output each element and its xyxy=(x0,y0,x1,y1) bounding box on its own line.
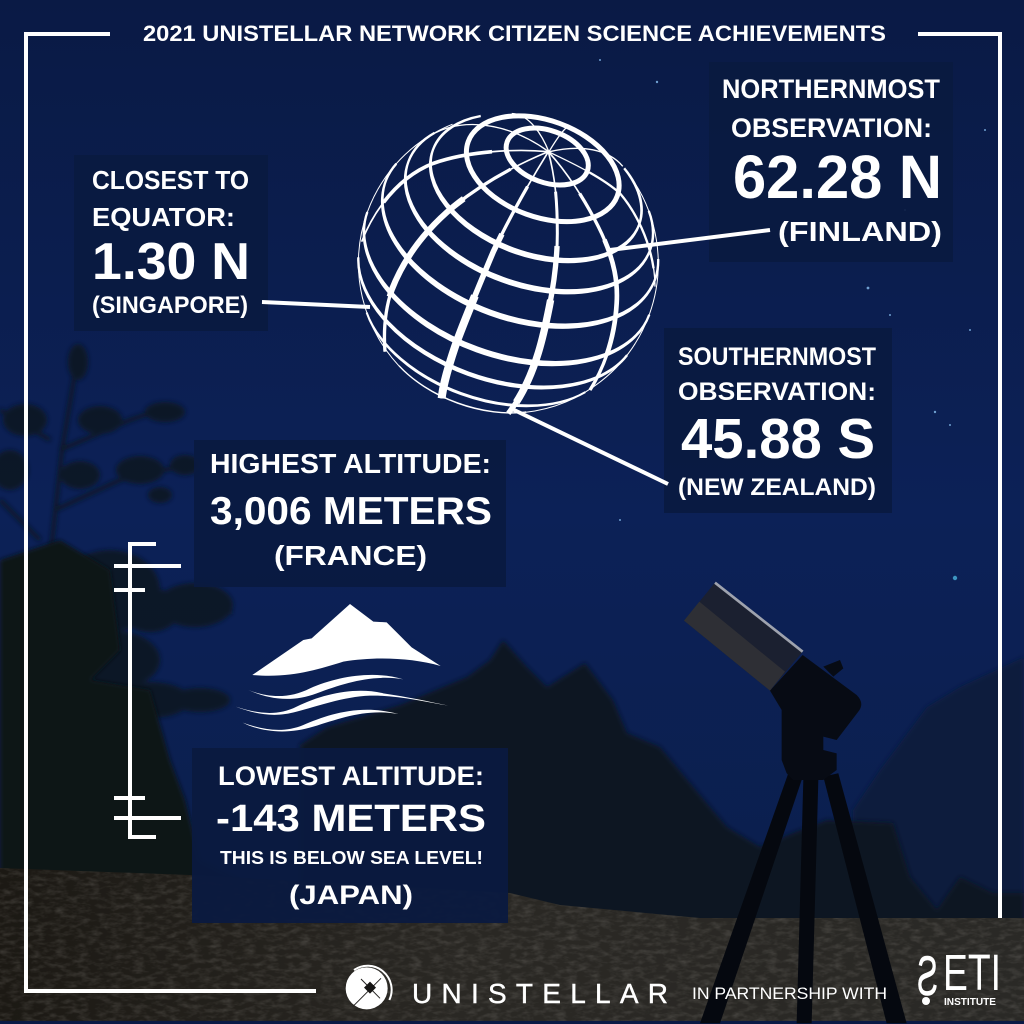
panel: closest to equator: EQUATOR: xyxy=(92,202,235,232)
panel: southernmost observation xyxy=(664,328,892,513)
title: 2021 UNISTELLAR NETWORK CITIZEN SCIENCE ACHIEVEMENTS xyxy=(143,21,886,46)
meridian: far left xyxy=(362,150,548,242)
meridian: far left front xyxy=(384,152,548,352)
partnership text: IN PARTNERSHIP WITH xyxy=(692,985,887,1003)
panel: closest to equator: (SINGAPORE) xyxy=(92,292,248,319)
panel: lowest altitude xyxy=(192,748,508,923)
panel: lowest altitude: (JAPAN) xyxy=(289,880,413,910)
panel: northernmost observation: NORTHERNMOST xyxy=(722,74,940,104)
logo: SETI Institute: S xyxy=(917,944,938,1007)
globe icon xyxy=(317,71,700,454)
panel: highest altitude xyxy=(194,440,506,587)
panel: closest to equator xyxy=(74,155,268,331)
logo: SETI Institute: ETI xyxy=(943,944,1001,1001)
front meridians xyxy=(362,150,655,413)
panel: southernmost observation: 45.88 S xyxy=(681,407,875,471)
panel: highest altitude: 3,006 METERS xyxy=(210,490,492,533)
lower tree mass xyxy=(0,540,240,890)
panel: lowest altitude: -143 METERS xyxy=(216,798,486,840)
panel: lowest altitude: LOWEST ALTITUDE: xyxy=(218,761,484,791)
panel: northernmost observation: OBSERVATION: xyxy=(731,113,932,143)
icon: mountain and waves xyxy=(236,604,448,731)
meridian: center front xyxy=(442,152,548,398)
meridian: far right xyxy=(548,152,655,287)
center treeline xyxy=(300,640,1024,935)
panel: southernmost observation: SOUTHERNMOST xyxy=(678,343,876,371)
left pine tree xyxy=(0,344,233,718)
panel: closest to equator: 1.30 N xyxy=(92,233,250,291)
rocky ground xyxy=(0,868,1024,1024)
mountain silhouette xyxy=(853,657,1024,930)
panel: highest altitude: (FRANCE) xyxy=(274,540,427,571)
logo: SETI Institute: INSTITUTE xyxy=(944,996,996,1008)
icon: Unistellar mark xyxy=(346,966,392,1009)
altitude scale xyxy=(114,544,181,837)
connector lines xyxy=(262,230,770,484)
panel: northernmost observation: 62.28 N xyxy=(733,143,942,211)
meridian: right of center front xyxy=(508,152,557,413)
logo: Unistellar xyxy=(346,966,668,1009)
telescope on tripod xyxy=(684,583,907,1023)
meridian: right front xyxy=(548,152,617,390)
panel: southernmost observation: OBSERVATION: xyxy=(678,378,876,406)
panel: southernmost observation: (NEW ZEALAND) xyxy=(678,474,876,501)
stars xyxy=(599,39,986,580)
logo: Unistellar: UNISTELLAR xyxy=(412,978,668,1009)
latitude rings and back meridians xyxy=(317,71,700,454)
panel: lowest altitude: THIS IS BELOW SEA LEVEL! xyxy=(220,848,483,868)
panel: northernmost observation xyxy=(709,62,953,262)
panel: closest to equator: CLOSEST TO xyxy=(92,165,249,195)
panel: northernmost observation: (FINLAND) xyxy=(778,216,942,247)
logo: SETI Institute xyxy=(917,944,1001,1008)
panel: highest altitude: HIGHEST ALTITUDE: xyxy=(210,448,491,479)
